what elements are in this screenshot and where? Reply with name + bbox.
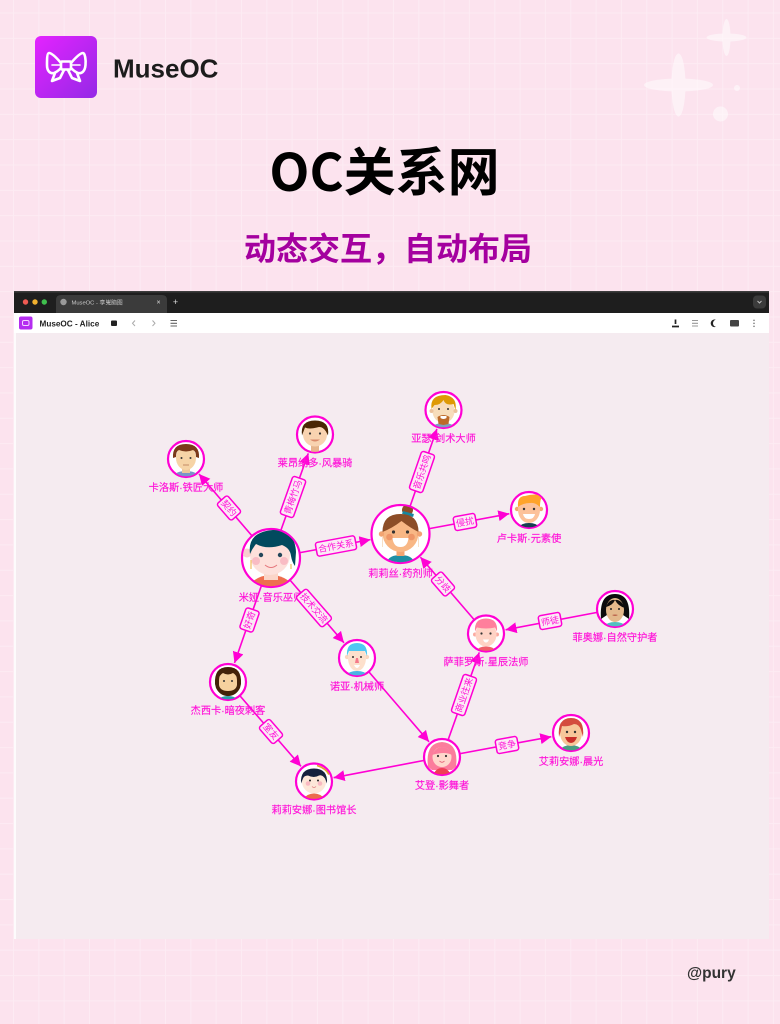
node: 莉莉安娜·图书馆长	[296, 764, 332, 800]
edge: 莉莉丝 to 亚瑟, 音乐共鸣	[400, 429, 437, 534]
browser tab bar	[14, 291, 769, 313]
node: 卡洛斯·铁匠大师	[168, 441, 204, 477]
node: 诺亚·机械师	[339, 640, 375, 676]
graph canvas	[14, 333, 769, 939]
node: 莱昂纳多·风暴骑	[297, 416, 333, 452]
edge label: 契约	[217, 495, 241, 521]
name labels: 米娅·音乐巫师	[239, 591, 303, 604]
browser tab bar: MuseOC - 享嵬脑图	[72, 298, 123, 306]
name labels: 萨菲罗斯·星辰法师	[444, 656, 528, 668]
edge label: 室友: 室友	[261, 721, 281, 742]
subtitle: 动态交互，自动布局	[244, 224, 532, 270]
title: OC关系网	[269, 131, 500, 206]
edge label: 分歧	[431, 571, 455, 597]
edge label: 契约: 契约	[219, 497, 239, 518]
browser window	[14, 291, 769, 939]
browser tab bar: ×	[156, 300, 161, 306]
node: 莉莉丝·药剂师	[372, 504, 430, 563]
name labels: 卡洛斯·铁匠大师	[149, 481, 223, 494]
edge label: 好奇: 好奇	[241, 610, 257, 630]
edge label: 合作关系	[315, 535, 357, 557]
edge: 艾登 to 萨菲罗斯, 商业往来	[442, 652, 479, 757]
edge: 米娅 to 卡洛斯, 契约	[199, 474, 271, 558]
name labels: 莉莉安娜·图书馆长	[272, 804, 356, 816]
node: 菲奥娜·自然守护者	[597, 591, 633, 627]
name labels: 莉莉丝·药剂师	[368, 567, 433, 580]
edge: 米娅 to 莱昂, 青梅竹马	[271, 453, 308, 558]
name labels: 卢卡斯·元素使	[497, 532, 561, 545]
edge label: 竞争: 竞争	[497, 738, 517, 752]
edge label: 师徒: 师徒	[540, 614, 560, 628]
edge label: 侵扰	[453, 513, 477, 531]
browser tab bar: +	[173, 297, 178, 307]
node: 艾莉安娜·晨光	[553, 715, 589, 751]
decorative sparkles	[644, 19, 746, 122]
node: 亚瑟·剑术大师	[426, 392, 462, 428]
edge: 诺亚 to 艾登	[357, 658, 429, 742]
edge label: 好奇	[239, 607, 260, 633]
logo icon: bow	[35, 36, 97, 98]
edge: 艾登 to 艾莉安娜, 竞争	[442, 737, 551, 757]
edge: 米娅 to 杰西卡, 好奇	[234, 558, 271, 663]
name labels: 艾莉安娜·晨光	[539, 755, 603, 768]
edge label: 室友	[259, 719, 283, 744]
edge: 米娅 to 诺亚, 技术交流	[271, 558, 344, 643]
name labels: 杰西卡·暗夜刺客	[191, 704, 265, 717]
name labels: 诺亚·机械师	[330, 680, 384, 693]
edge label: 合作关系: 合作关系	[317, 537, 355, 554]
name labels: 亚瑟·剑术大师	[411, 432, 476, 445]
edge label: 技术交流: 技术交流	[298, 591, 330, 625]
edge label: 音乐共鸣: 音乐共鸣	[411, 453, 433, 491]
node: 杰西卡·暗夜刺客	[210, 664, 246, 700]
edge: 萨菲罗斯 to 莉莉丝, 分歧	[420, 557, 486, 634]
edge label: 商业往来: 商业往来	[453, 676, 475, 714]
node: 卢卡斯·元素使	[511, 492, 547, 528]
edge label: 侵扰: 侵扰	[455, 515, 475, 529]
edge: 艾登 to 莉莉安娜	[334, 757, 442, 778]
name labels: 菲奥娜·自然守护者	[573, 631, 657, 644]
name labels: 艾登·影舞者	[415, 779, 469, 792]
browser toolbar	[14, 313, 769, 333]
edge: 米娅 to 莉莉丝, 合作关系	[271, 540, 370, 558]
edge label: 分歧: 分歧	[433, 573, 453, 594]
edge label: 青梅竹马: 青梅竹马	[282, 478, 304, 516]
browser toolbar: MuseOC - Alice	[40, 320, 100, 328]
author credit: @pury	[687, 965, 736, 982]
node: 米娅·音乐巫师	[242, 529, 300, 587]
node: 萨菲罗斯·星辰法师	[468, 616, 504, 652]
name labels	[149, 432, 657, 816]
edge: 杰西卡 to 莉莉安娜, 室友	[228, 682, 301, 766]
node: 艾登·影舞者	[424, 739, 460, 775]
edge label: 竞争	[495, 736, 519, 754]
brand name: MuseOC	[113, 54, 219, 84]
edge label: 师徒	[538, 612, 562, 630]
edge: 莉莉丝 to 卢卡斯, 侵扰	[400, 514, 509, 534]
name labels: 莱昂纳多·风暴骑	[278, 456, 352, 470]
edge: 菲奥娜 to 萨菲罗斯, 师徒	[506, 609, 615, 630]
